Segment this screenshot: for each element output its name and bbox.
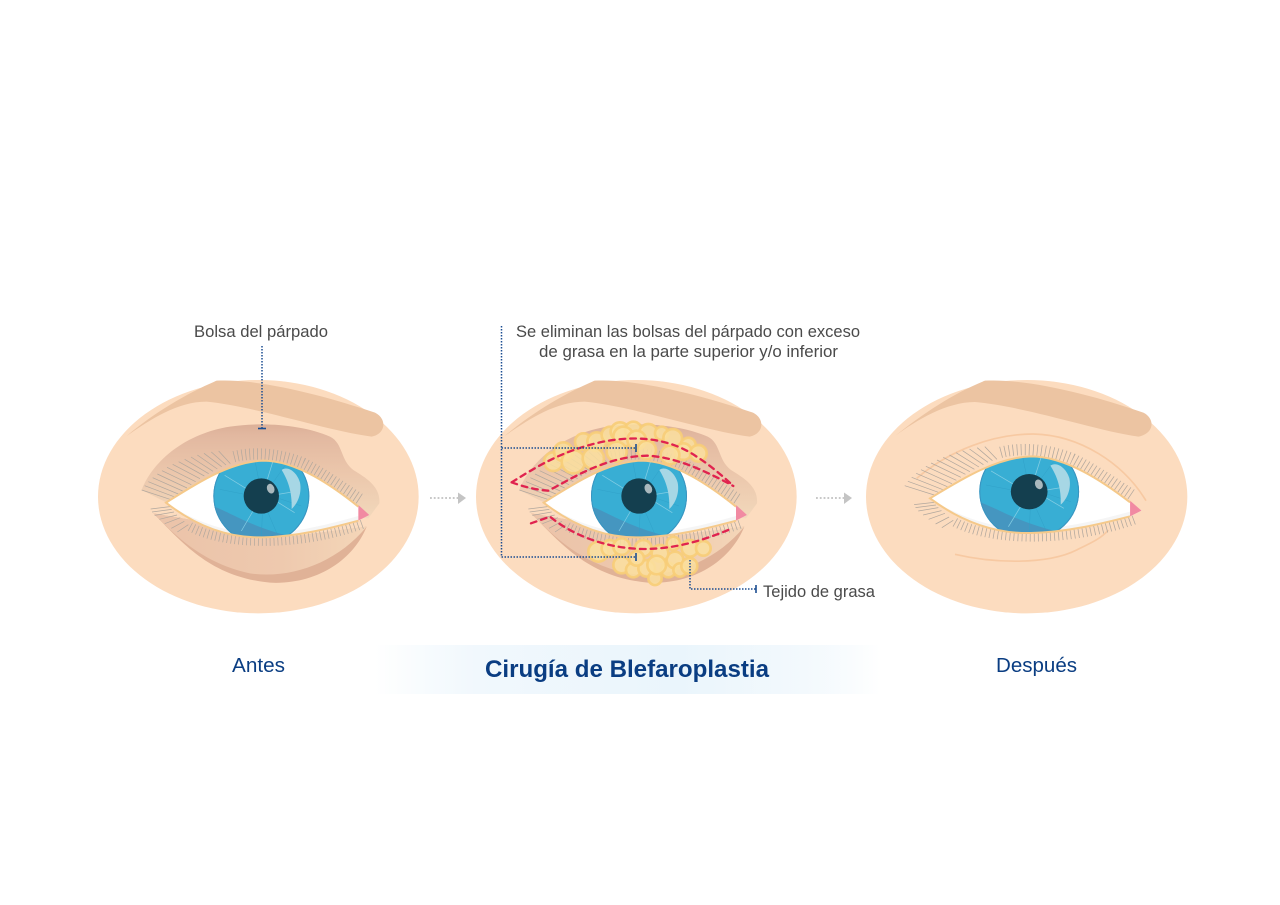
description text: Se eliminan las bolsas del párpado con exceso <box>516 323 860 341</box>
caption: after: Después <box>996 655 1077 677</box>
incision lines <box>512 438 733 549</box>
main title: Cirugía de Blefaroplastia <box>485 656 770 683</box>
eye <box>930 444 1142 542</box>
arrow: surgery to after <box>816 492 852 504</box>
upper fat tissue <box>544 422 707 473</box>
eye <box>166 448 369 546</box>
lower fat tissue <box>588 537 711 585</box>
eye illustration: before <box>98 380 419 613</box>
leader: fat tissue <box>690 560 756 593</box>
lashes <box>142 451 365 541</box>
lashes <box>905 447 1137 537</box>
title band <box>375 645 880 694</box>
eyebrow <box>505 380 761 437</box>
eyelid bags <box>142 424 379 583</box>
face skin <box>98 380 419 613</box>
arrow: before to surgery <box>430 492 466 504</box>
face skin <box>476 380 797 613</box>
leader: eyelid bag <box>258 346 266 428</box>
description text <box>516 323 860 361</box>
face skin <box>866 380 1187 613</box>
eye illustration: after <box>866 380 1187 613</box>
eyelid bags <box>519 424 757 583</box>
label: eyelid bag: Bolsa del párpado <box>194 323 328 341</box>
leader: description <box>502 326 636 561</box>
lashes <box>519 451 743 541</box>
eye illustration: surgery <box>476 380 797 613</box>
label: fat tissue: Tejido de grasa <box>763 583 876 601</box>
caption: before: Antes <box>232 655 285 677</box>
eyebrow <box>127 380 383 437</box>
eyelid creases <box>917 434 1146 561</box>
description text: de grasa en la parte superior y/o inferior <box>539 343 839 361</box>
eye <box>544 448 747 546</box>
eyebrow <box>895 380 1152 437</box>
